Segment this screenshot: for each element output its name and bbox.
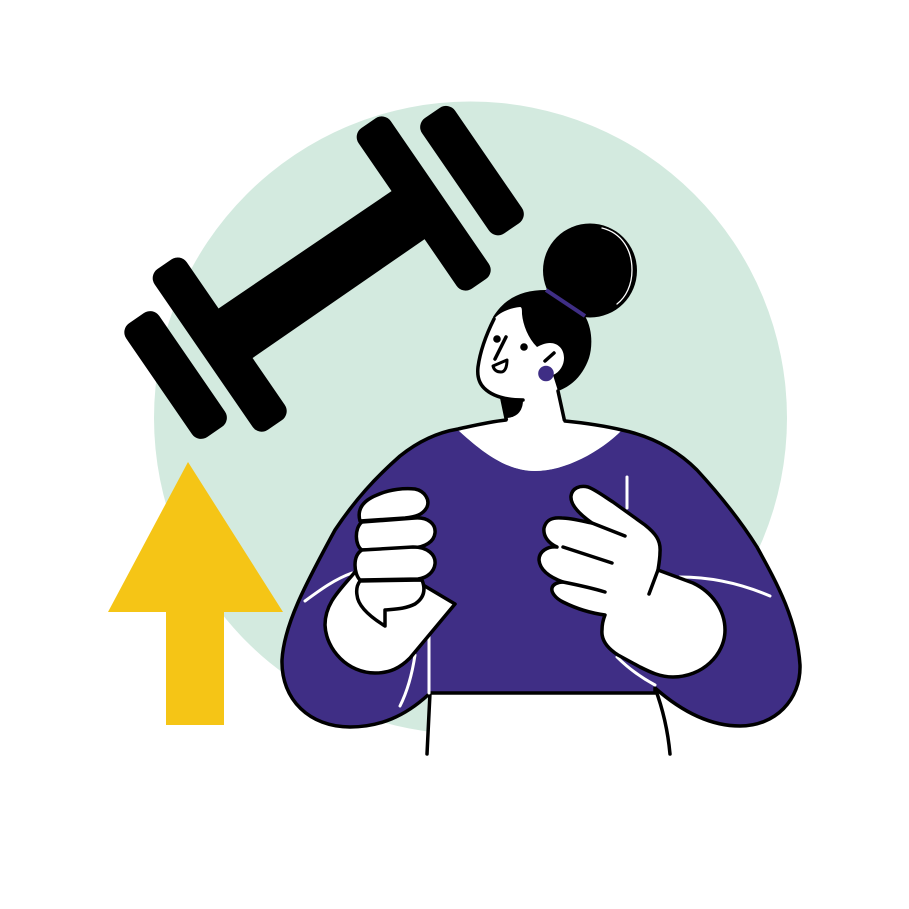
earring bbox=[538, 366, 554, 381]
neckline bbox=[458, 420, 622, 471]
arrow: yellow up arrow bbox=[108, 462, 283, 725]
icon: dumbbell bbox=[120, 102, 528, 443]
neck bbox=[502, 370, 565, 423]
ear line bbox=[545, 353, 554, 361]
face bbox=[478, 307, 565, 423]
neck lines and shadow bbox=[502, 400, 523, 418]
lower torso and trouser lines bbox=[427, 688, 670, 754]
hair band bbox=[546, 290, 585, 316]
mouth bbox=[493, 360, 507, 372]
sweater outline bbox=[282, 420, 800, 727]
eyes bbox=[520, 343, 528, 351]
palm bbox=[325, 572, 455, 673]
hair bun bbox=[543, 224, 637, 318]
sweater fold lines bbox=[305, 477, 770, 706]
background circle bbox=[154, 102, 787, 734]
nose bbox=[495, 337, 506, 359]
fingers bbox=[359, 489, 428, 521]
figure: woman bbox=[282, 224, 800, 754]
sweater bbox=[282, 420, 800, 727]
right hand: open bbox=[539, 486, 725, 677]
finger lines bbox=[563, 523, 658, 594]
thumb bbox=[357, 580, 424, 626]
left hand: fist bbox=[325, 489, 455, 673]
hair bbox=[493, 290, 591, 391]
